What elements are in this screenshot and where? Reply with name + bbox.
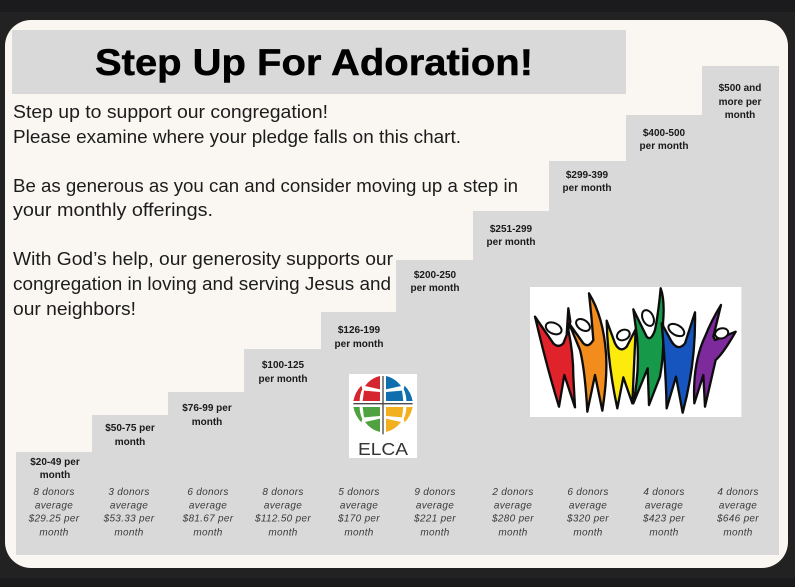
staircase chart background [16,66,779,555]
donors step 2: $53.33 per [103,514,155,524]
donors step 7: 2 donors [492,487,534,498]
green figure [633,288,664,405]
step 7 label: $251-299 [490,224,532,235]
step 8 label: per month [563,183,611,194]
donors step 9: average [645,500,683,512]
donors step 4: average [264,500,302,512]
step 9 label: $400-500 [643,128,685,139]
donors step 1: $29.25 per [28,514,80,524]
step 10 label: more per [719,97,762,108]
donors step 8: 6 donors [567,487,609,498]
donors step 10: average [719,500,757,512]
intro text block: Be as generous as you can and consider moving up a step in [13,176,518,196]
donors step 5: month [344,528,374,538]
step 6 label: per month [411,283,459,294]
donor statistics row [28,487,759,538]
donors step 3: average [189,500,227,512]
donors step 10: $646 per [716,514,759,524]
intro text block: Step up to support our congregation! [13,102,328,122]
donors step 9: $423 per [642,514,685,524]
donors step 6: average [416,500,454,512]
donors step 9: month [649,528,679,538]
icon: ELCA logo [349,374,417,459]
donors step 10: month [723,528,753,538]
step 8 label: $299-399 [566,170,608,181]
red figure [535,308,575,407]
orange figure [569,293,606,412]
donors step 2: average [110,500,148,512]
donors step 4: 8 donors [262,487,304,498]
title: Step Up For Adoration! [95,42,533,83]
intro text block [13,102,518,319]
donors step 3: month [193,528,223,538]
step 1 label: $20-49 per [30,457,80,468]
yellow figure [607,321,636,408]
purple figure [694,305,736,407]
donors step 5: $170 per [337,514,380,524]
donors step 10: 4 donors [717,487,759,498]
donors step 5: average [340,500,378,512]
donors step 7: month [498,528,528,538]
step 6 label: $200-250 [414,270,456,281]
step 7 label: per month [487,237,535,248]
step labels: pledge ranges [30,83,762,481]
donors step 1: 8 donors [33,487,75,498]
donors step 1: average [35,500,73,512]
donors step 1: month [39,528,69,538]
step 5 label: $126-199 [338,325,380,336]
step 1 label: month [40,470,70,481]
donors step 2: 3 donors [108,487,150,498]
rainbow people figure image [530,287,741,417]
donors step 2: month [114,528,144,538]
donors step 6: 9 donors [414,487,456,498]
donors step 4: month [268,528,298,538]
donors step 7: average [494,500,532,512]
step 10 label: $500 and [719,83,761,94]
title banner [12,30,626,94]
intro text block: With God’s help, our generosity supports our [13,249,393,269]
intro text block: Please examine where your pledge falls on this chart. [13,127,461,147]
donors step 6: $221 per [413,514,456,524]
intro text block: your monthly offerings. [13,200,213,220]
halo heads [544,308,729,342]
donors step 8: month [573,528,603,538]
step 3 label: month [192,417,222,428]
step 9 label: per month [640,141,688,152]
blue figure [662,312,695,413]
intro text block: our neighbors! [13,299,136,319]
donors step 9: 4 donors [643,487,685,498]
intro text block: congregation in loving and serving Jesus and [13,274,391,294]
step 10 label: month [725,110,755,121]
donors step 8: $320 per [566,514,609,524]
icon: ELCA logo: ELCA [358,439,408,459]
step 3 label: $76-99 per [182,403,232,414]
donors step 4: $112.50 per [254,514,311,524]
donors step 7: $280 per [491,514,534,524]
donors step 6: month [420,528,450,538]
donors step 3: 6 donors [187,487,229,498]
step 2 label: month [115,437,145,448]
step 5 label: per month [335,339,383,350]
donors step 8: average [569,500,607,512]
donors step 3: $81.67 per [182,514,234,524]
donors step 5: 5 donors [338,487,380,498]
step 2 label: $50-75 per [105,423,155,434]
step 4 label: per month [259,374,307,385]
step 4 label: $100-125 [262,360,304,371]
